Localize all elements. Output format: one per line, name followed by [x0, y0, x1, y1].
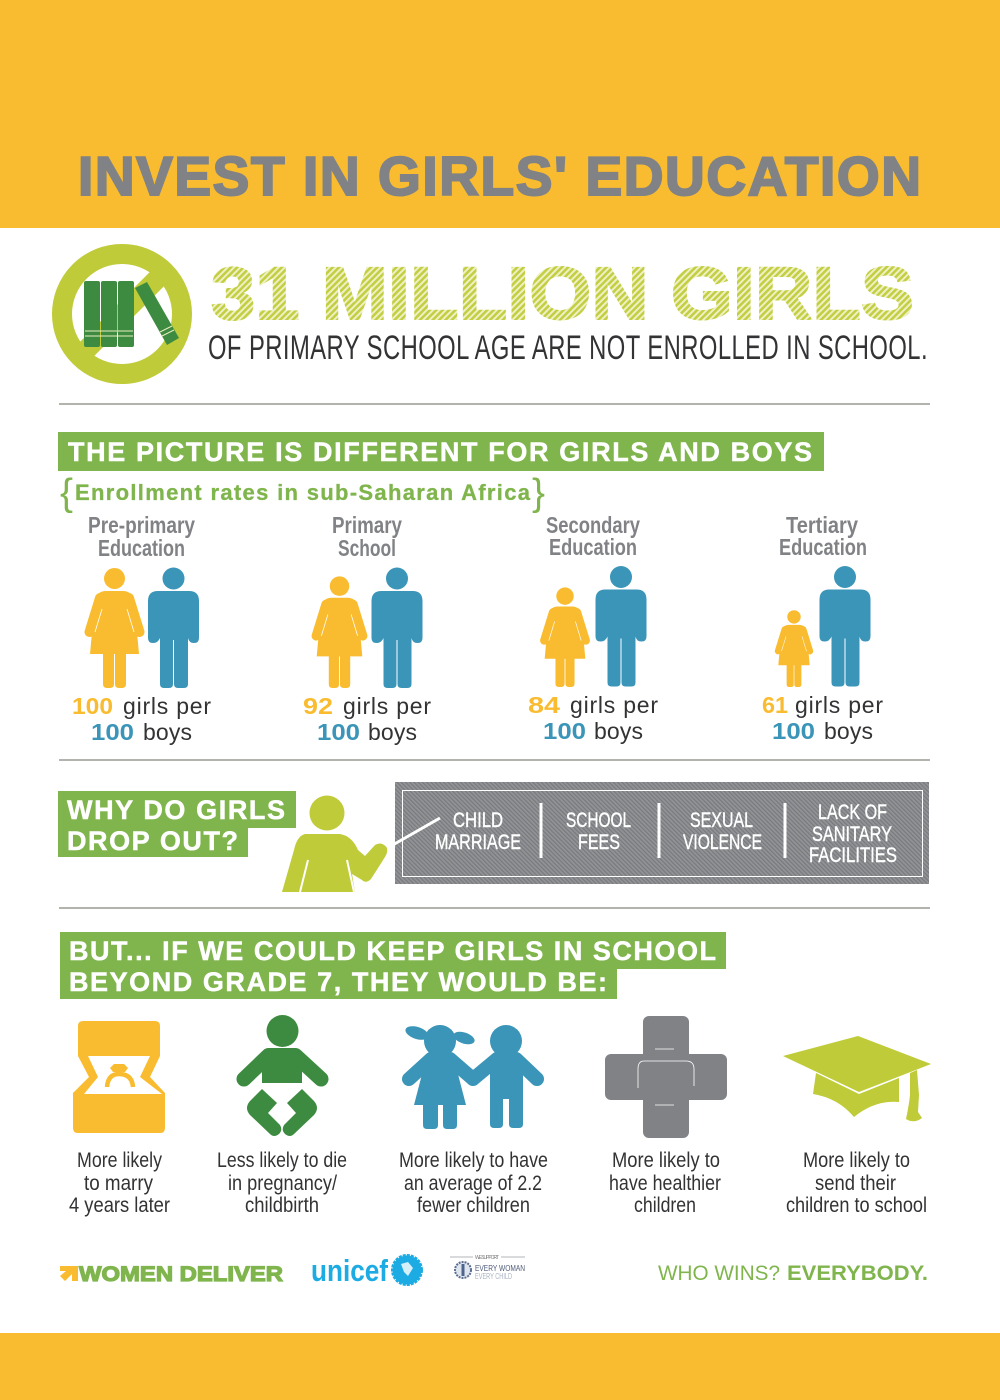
- column: primary school: School: [338, 535, 396, 561]
- reason: school fees: FEES: [578, 831, 620, 854]
- logo: unicef: unicef: [311, 1253, 389, 1288]
- column: tertiary education: boys: [824, 718, 873, 744]
- reason: sexual violence: [683, 809, 762, 854]
- subheading: enrollment rates: }: [532, 472, 545, 514]
- icon: no books: [62, 254, 182, 374]
- column: secondary education: Education: [549, 534, 637, 560]
- reason: sexual violence: VIOLENCE: [683, 831, 762, 854]
- subheading: enrollment rates: [60, 472, 545, 514]
- benefit: marry later: to marry: [84, 1172, 153, 1195]
- reason: lack of sanitary facilities: FACILITIES: [809, 844, 897, 867]
- stat: 84: [528, 692, 560, 718]
- reason: lack of sanitary facilities: [809, 801, 897, 867]
- benefit: healthier children: children: [634, 1194, 696, 1217]
- title: INVEST IN GIRLS' EDUCATION: [78, 145, 921, 207]
- reason: school fees: [566, 809, 631, 854]
- benefit: less likely to die: Less likely to die: [217, 1149, 347, 1172]
- benefit: fewer children: More likely to have: [399, 1149, 548, 1172]
- benefit: healthier children: have healthier: [609, 1172, 721, 1195]
- icon: girl figure: [90, 568, 140, 688]
- subheading: OF PRIMARY SCHOOL AGE ARE NOT ENROLLED IN SCHOOL.: [208, 329, 928, 367]
- section heading: keep girls in school: [60, 932, 726, 999]
- logo: every woman every child: WE SUPPORT: [475, 1255, 499, 1261]
- logo: women deliver: WOMEN DELIVER: [79, 1263, 283, 1286]
- section heading: keep girls in school: BUT... IF WE COULD KEEP GIRLS IN SCHOOL: [69, 936, 716, 966]
- column: tertiary education: 100: [772, 718, 815, 744]
- benefit: marry later: [69, 1021, 170, 1217]
- column: tertiary education: girls per: [795, 692, 883, 718]
- reason: lack of sanitary facilities: SANITARY: [812, 823, 892, 846]
- subheading: enrollment rates: Enrollment rates in sub-Saharan Africa: [75, 480, 531, 505]
- column: pre-primary education: [72, 512, 211, 745]
- tagline: WHO WINS?: [658, 1262, 780, 1285]
- column: primary school: boys: [368, 719, 417, 745]
- tagline: EVERYBODY.: [787, 1262, 928, 1285]
- column: pre-primary education: Education: [98, 535, 185, 561]
- column: pre-primary education: girls per: [123, 693, 211, 719]
- column: secondary education: girls per: [570, 692, 658, 718]
- column: secondary education: Secondary: [546, 512, 640, 538]
- icon: ring box: [73, 1021, 165, 1133]
- benefit: less likely to die: [217, 1015, 347, 1217]
- icon: boy figure: [372, 568, 422, 688]
- icon: pointing teacher: [282, 796, 387, 892]
- subheading: enrollment rates: {: [60, 472, 73, 514]
- icon: boy figure: [596, 566, 646, 686]
- column: primary school: girls per: [343, 693, 431, 719]
- icon: graduation cap: [783, 1036, 931, 1121]
- logo: every woman every child: EVERY WOMAN: [475, 1264, 525, 1273]
- column: tertiary education: Tertiary: [786, 512, 858, 538]
- column: pre-primary education: boys: [143, 719, 192, 745]
- column: pre-primary education: Pre-primary: [88, 512, 195, 538]
- reason: child marriage: [435, 809, 521, 854]
- reason: child marriage: CHILD: [453, 809, 503, 832]
- top banner: [0, 0, 1000, 228]
- benefit: send children to school: children to school: [786, 1194, 927, 1217]
- logo: every woman every child: EVERY CHILD: [475, 1272, 512, 1281]
- column: pre-primary education: 100: [91, 719, 134, 745]
- reason: child marriage: MARRIAGE: [435, 831, 521, 854]
- column: primary school: Primary: [332, 512, 402, 538]
- column: primary school: [303, 512, 431, 745]
- section heading: why do girls drop out: DROP OUT?: [67, 826, 238, 856]
- benefit: healthier children: [605, 1016, 727, 1217]
- column: secondary education: 100: [543, 718, 586, 744]
- column: secondary education: [528, 512, 658, 744]
- icon: medical cross: [605, 1016, 727, 1138]
- reason: school fees: SCHOOL: [566, 809, 631, 832]
- icon: boy figure: [148, 568, 199, 688]
- benefit: fewer children: [399, 1024, 548, 1217]
- bottom banner: [0, 1333, 1000, 1400]
- logo: every woman every child: [450, 1255, 525, 1281]
- arrow: pointer: [391, 818, 440, 846]
- column: primary school: 100: [317, 719, 360, 745]
- icon: baby: [244, 1015, 321, 1136]
- icon: two children: [404, 1024, 537, 1129]
- tagline: [658, 1262, 928, 1285]
- benefit: less likely to die: in pregnancy/: [228, 1172, 337, 1195]
- stat: 100: [72, 693, 113, 719]
- benefit: marry later: More likely: [77, 1149, 162, 1172]
- stat: 61: [762, 692, 788, 718]
- benefit: send children to school: send their: [815, 1172, 896, 1195]
- icon: girl figure: [778, 610, 810, 687]
- icon: girl figure: [316, 576, 363, 688]
- reason: sexual violence: SEXUAL: [690, 809, 753, 832]
- section heading: keep girls in school: BEYOND GRADE 7, THEY WOULD BE:: [69, 967, 607, 997]
- benefit: fewer children: fewer children: [417, 1194, 530, 1217]
- stat: 92: [303, 693, 333, 719]
- benefit: marry later: 4 years later: [69, 1194, 170, 1217]
- column: tertiary education: [762, 512, 883, 744]
- benefit: healthier children: More likely to: [612, 1149, 720, 1172]
- benefit: send children to school: More likely to: [803, 1149, 910, 1172]
- column: tertiary education: Education: [779, 534, 867, 560]
- headline: 31 million girls: 31 MILLION GIRLS: [211, 252, 914, 335]
- benefit: fewer children: an average of 2.2: [404, 1172, 542, 1195]
- reason: lack of sanitary facilities: LACK OF: [818, 801, 887, 824]
- section heading: the picture is different: THE PICTURE IS DIFFERENT FOR GIRLS AND BOYS: [68, 437, 812, 467]
- benefit: less likely to die: childbirth: [245, 1194, 319, 1217]
- column: secondary education: boys: [594, 718, 643, 744]
- icon: girl figure: [544, 587, 586, 687]
- panel: reasons for dropping out: [391, 782, 929, 884]
- section heading: why do girls drop out: [58, 791, 296, 857]
- section heading: why do girls drop out: WHY DO GIRLS: [67, 795, 285, 825]
- benefit: send children to school: [783, 1036, 931, 1217]
- icon: boy figure: [820, 566, 870, 686]
